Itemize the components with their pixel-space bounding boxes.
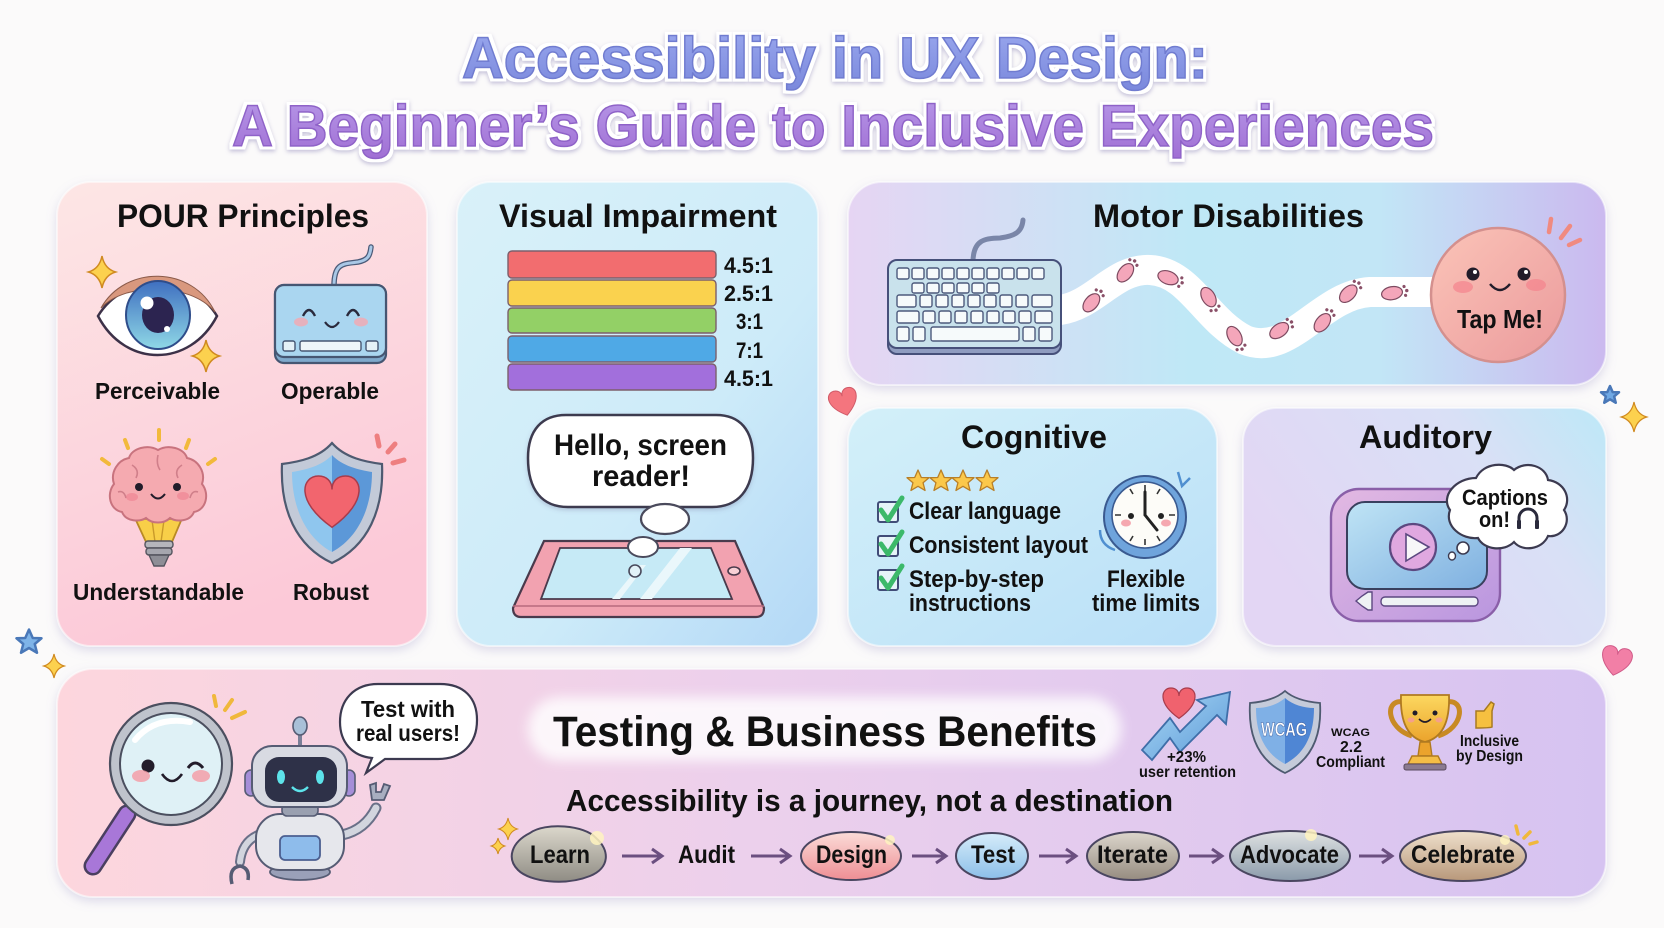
panel: Auditory — [1243, 408, 1606, 646]
path: winding white trail — [1060, 270, 1440, 343]
icon: keyboard face — [275, 247, 386, 363]
journey step: Celebrate: Celebrate — [1411, 841, 1515, 869]
journey step: Iterate — [1087, 832, 1179, 880]
heading: Visual Impairment: Visual Impairment — [499, 198, 777, 234]
journey step: Test — [956, 833, 1028, 879]
caption: Flexible time limits: time limits — [1092, 590, 1200, 617]
checklist — [878, 498, 1088, 617]
panel: Testing and Business Benefits — [57, 669, 1606, 897]
heading: Testing and Business Benefits: Testing & Business Benefits — [553, 708, 1097, 756]
journey step: Advocate: Advocate — [1240, 841, 1339, 869]
footprints — [1080, 256, 1410, 354]
thought bubble dot — [641, 504, 689, 534]
caption: WCAG 2.2 Compliant — [1316, 727, 1385, 771]
checklist: instructions — [909, 590, 1031, 617]
decoration: gold sparkle left — [44, 654, 64, 678]
checklist: Step-by-step — [909, 566, 1044, 593]
journey step: Design — [801, 832, 901, 880]
icon: full keyboard — [888, 220, 1061, 354]
cloud bubble: Captions on!: on! — [1479, 507, 1510, 532]
icon: Tap Me button: Tap Me! — [1457, 304, 1543, 334]
icon: shield heart — [282, 436, 404, 563]
caption: Inclusive by Design: by Design — [1456, 748, 1523, 765]
label: Robust: Robust — [293, 579, 369, 605]
journey step: Design: Design — [816, 841, 887, 869]
speech bubble: Test with real users — [340, 684, 477, 773]
icon: trophy — [1391, 695, 1459, 770]
heading: Cognitive: Cognitive — [961, 419, 1107, 455]
icon: WCAG shield — [1250, 691, 1320, 773]
journey step: Celebrate — [1400, 826, 1537, 881]
icon: magnifying glass — [93, 696, 245, 866]
speech bubble: Hello, screen reader!: reader! — [592, 460, 690, 493]
ratio labels: 4.5:1 — [724, 366, 773, 391]
caption: +23% user retention — [1139, 749, 1236, 781]
sparkles near Learn — [491, 818, 517, 854]
caption: WCAG 2.2 Compliant: Compliant — [1316, 754, 1385, 771]
speech bubble: Hello, screen reader! — [528, 415, 753, 507]
panel: Cognitive — [848, 408, 1217, 646]
checklist: Consistent layout — [909, 532, 1088, 559]
caption: WCAG 2.2 Compliant: WCAG — [1331, 727, 1370, 739]
icon: robot — [231, 717, 390, 884]
heading: Auditory: Auditory — [1359, 419, 1492, 455]
cloud bubble: Captions on! — [1447, 465, 1567, 560]
label: Perceivable: Perceivable — [95, 378, 220, 404]
title: Accessibility in UX Design: — [462, 26, 1208, 91]
icon: eye — [88, 256, 220, 372]
caption: +23% user retention: user retention — [1139, 764, 1236, 781]
arrow — [1039, 849, 1076, 863]
journey step: Audit: Audit — [678, 841, 736, 869]
caption: Inclusive by Design: Inclusive — [1460, 733, 1519, 750]
panel: POUR Principles — [57, 182, 427, 646]
journey step: Learn — [512, 826, 606, 882]
ratio labels: 4.5:1 — [724, 253, 773, 278]
checklist: Clear language — [909, 498, 1061, 525]
decoration: heart right — [1598, 644, 1634, 678]
journey step: Learn: Learn — [530, 841, 590, 869]
arrow — [622, 849, 662, 863]
icon: video player — [1331, 489, 1500, 621]
caption: +23% user retention: +23% — [1167, 749, 1206, 766]
tagline: Accessibility is a journey, not a destination — [566, 783, 1173, 818]
heading: POUR Principles: POUR Principles — [117, 198, 369, 234]
caption: Inclusive by Design — [1456, 733, 1523, 765]
title — [232, 26, 1434, 159]
decoration: blue star right — [1601, 386, 1619, 403]
icon: clock — [1100, 472, 1190, 558]
star rating — [907, 470, 998, 490]
ratio labels — [724, 253, 773, 391]
speech bubble: Hello, screen reader!: Hello, screen — [554, 429, 727, 462]
white pill behind heading — [528, 697, 1121, 761]
ratio labels: 3:1 — [736, 309, 763, 334]
arrow — [1359, 849, 1392, 863]
panel: Visual Impairment — [457, 182, 818, 646]
heading: Motor Disabilities: Motor Disabilities — [1093, 198, 1364, 234]
icon: brain bulb — [102, 430, 215, 566]
decoration: heart centre — [827, 386, 861, 419]
journey step: Iterate: Iterate — [1097, 841, 1168, 869]
arrow — [1189, 849, 1222, 863]
journey step: Advocate — [1230, 829, 1350, 881]
icon: thumbs up — [1476, 702, 1494, 728]
ratio labels: 7:1 — [736, 338, 763, 363]
decoration: blue star left — [16, 630, 42, 653]
chart: contrast ratio bars — [508, 251, 716, 390]
panel: Motor Disabilities — [848, 182, 1606, 385]
caption: Flexible time limits: Flexible — [1107, 566, 1185, 593]
arrow — [751, 849, 790, 863]
icon: WCAG shield: WCAG — [1261, 720, 1307, 741]
icon: tablet — [513, 537, 764, 617]
cloud bubble: Captions on!: Captions — [1462, 485, 1548, 510]
ratio labels: 2.5:1 — [724, 281, 773, 306]
arrow — [912, 849, 946, 863]
title: A Beginner’s Guide to Inclusive Experiences — [232, 94, 1434, 159]
label: Operable: Operable — [281, 378, 379, 404]
speech bubble: Test with real users: real users! — [356, 720, 460, 746]
label: Understandable: Understandable — [73, 579, 244, 605]
icon: Tap Me button — [1431, 219, 1580, 362]
decoration: gold sparkle right — [1621, 402, 1647, 432]
journey step: Test: Test — [971, 841, 1016, 869]
speech bubble: Test with real users: Test with — [361, 696, 455, 722]
caption: WCAG 2.2 Compliant: 2.2 — [1340, 739, 1362, 756]
caption: Flexible time limits — [1092, 566, 1200, 617]
icon: retention growth arrow — [1142, 688, 1230, 760]
